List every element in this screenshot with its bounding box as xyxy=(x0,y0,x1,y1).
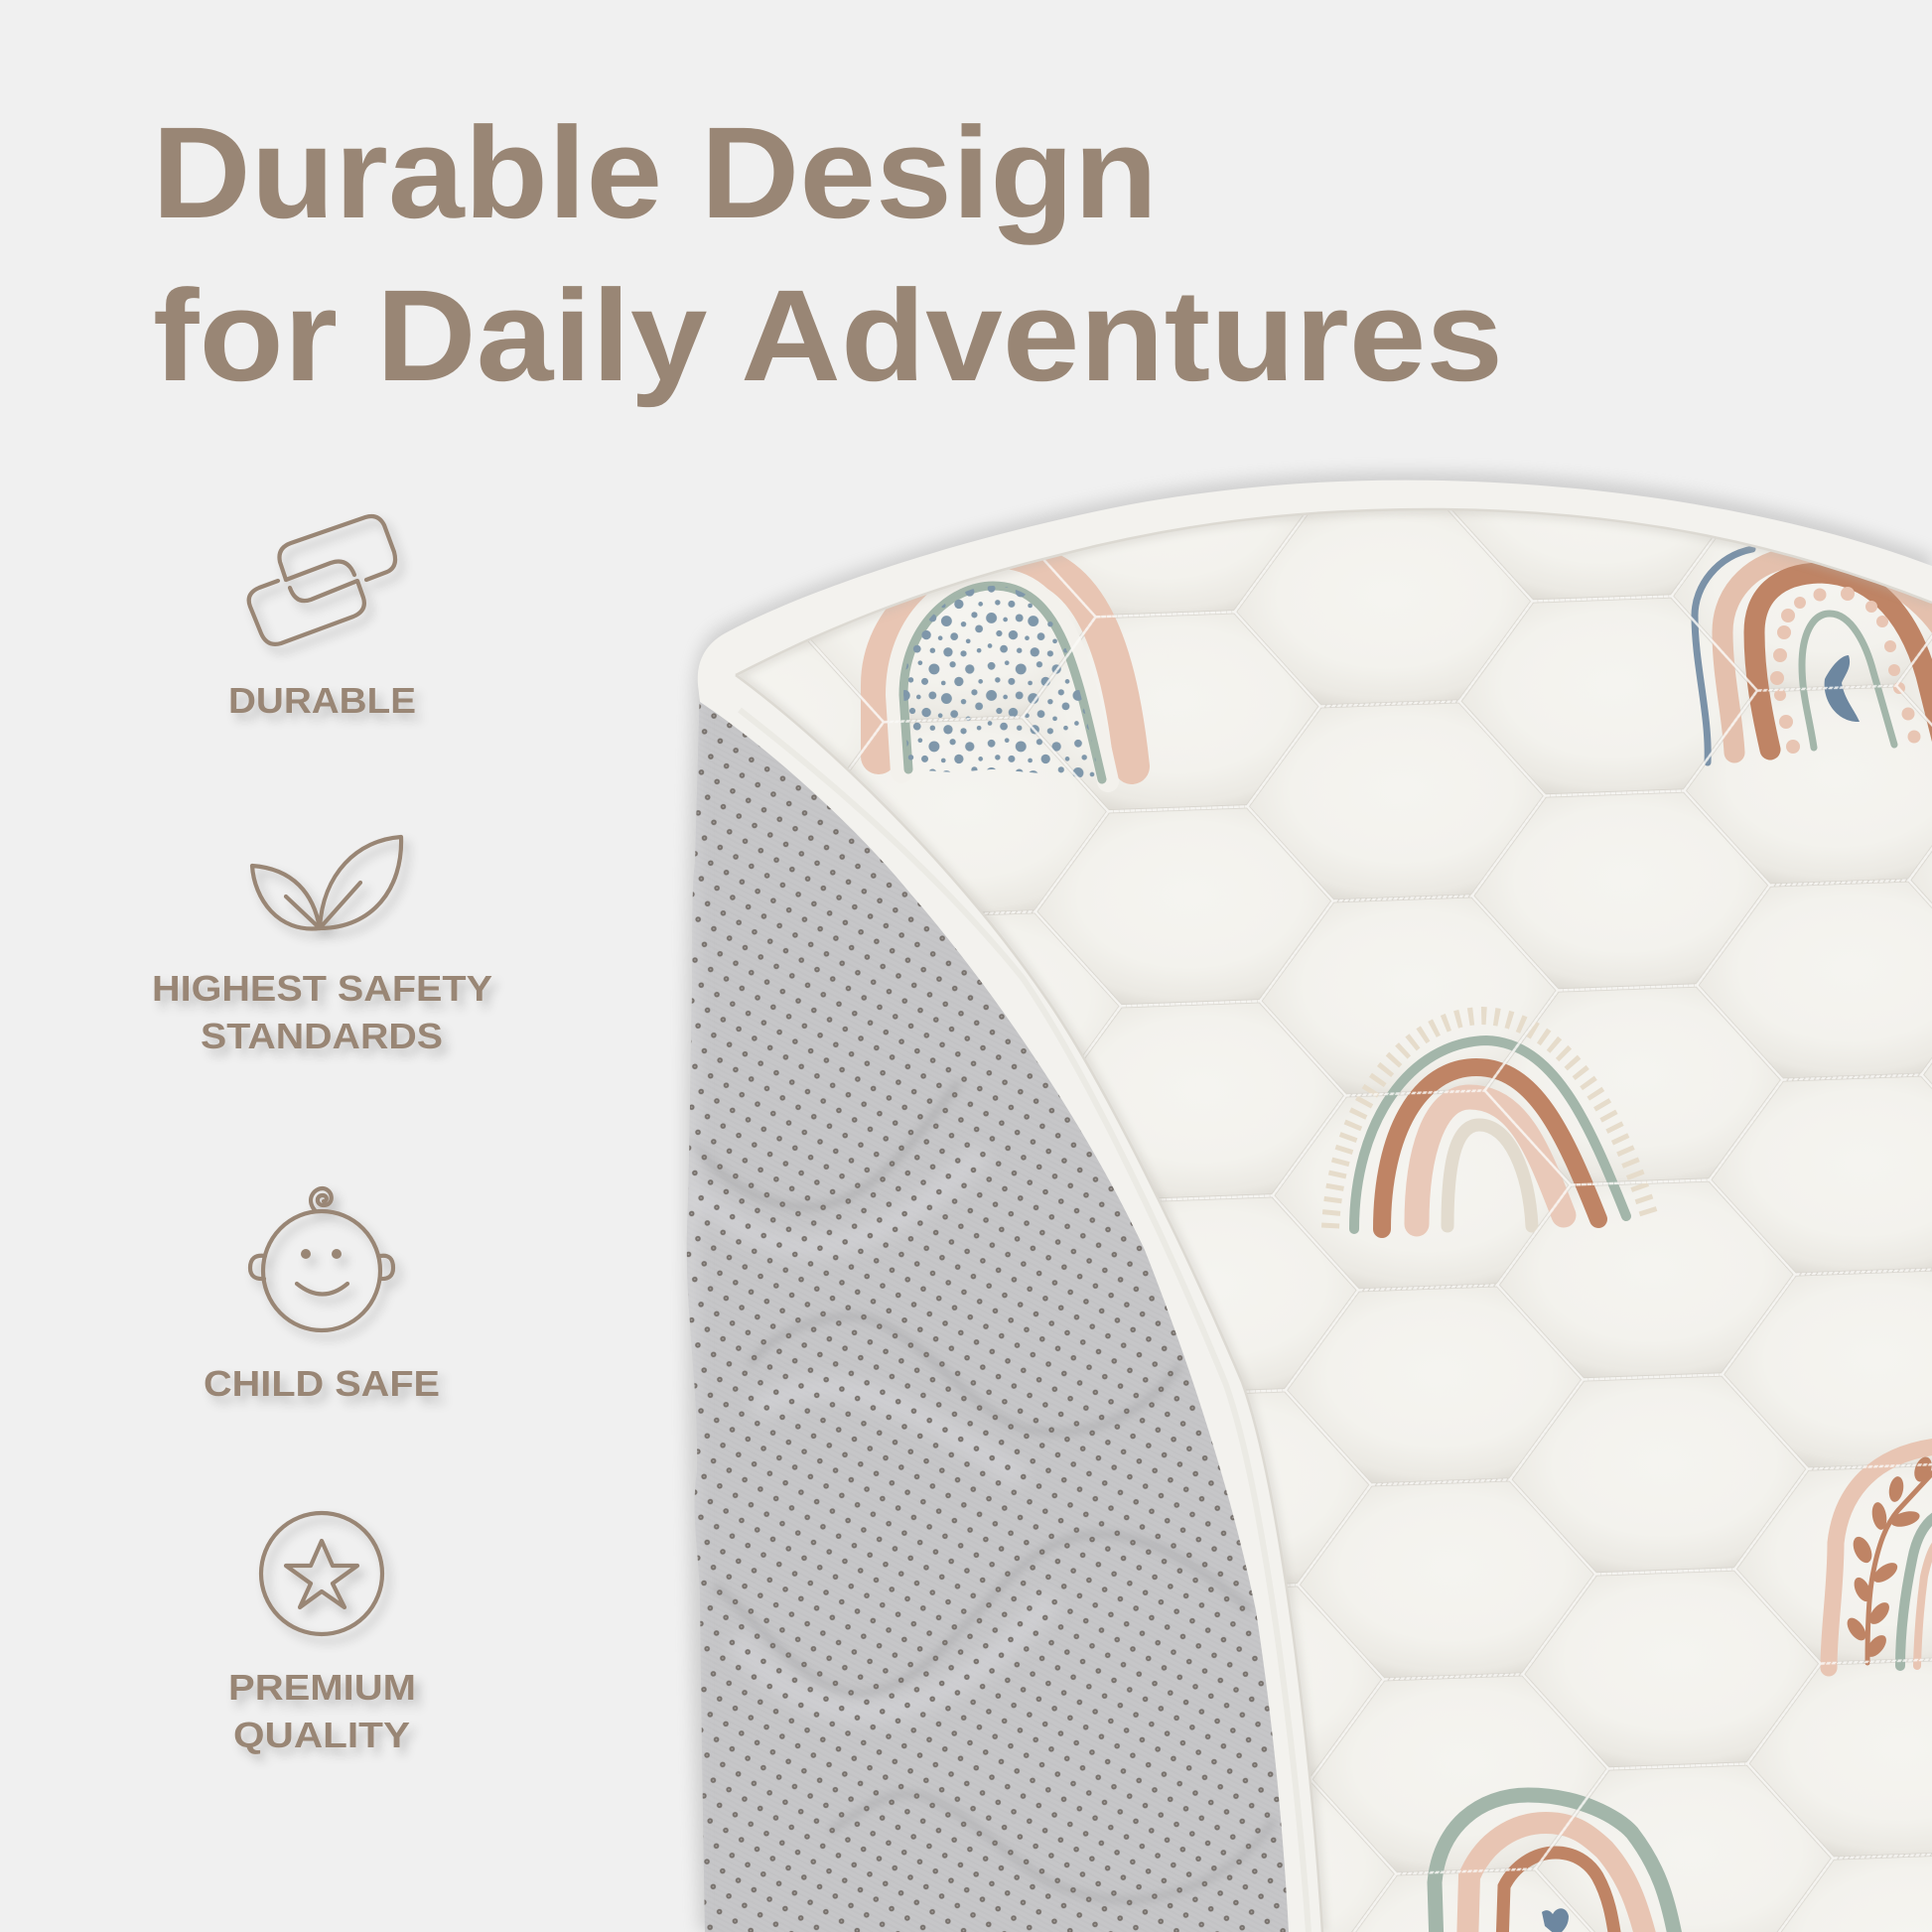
label: premium quality: PREMIUM xyxy=(228,1667,416,1708)
title: for Daily Adventures xyxy=(153,262,1503,408)
binding stitching xyxy=(736,509,1932,1932)
rainbow: centre with rays xyxy=(1330,1016,1651,1229)
feature: child safe xyxy=(204,1188,440,1404)
icon: chain links xyxy=(249,516,395,644)
mat shadow xyxy=(685,473,1932,1932)
feature: durable xyxy=(228,516,416,721)
title: Durable Design xyxy=(152,99,1158,245)
feature: highest safety standards xyxy=(152,837,492,1056)
product photo: quilted mat xyxy=(665,473,1932,1932)
quilted face xyxy=(715,496,1932,1932)
rainbow: dotted arch, top left xyxy=(879,562,1132,781)
underside: grey dotted fabric xyxy=(665,675,1340,1932)
title xyxy=(152,99,1503,408)
feature list xyxy=(152,516,492,1755)
quilting stitches xyxy=(715,496,1932,1932)
binding inner shadow xyxy=(736,509,1932,1932)
label: durable: DURABLE xyxy=(228,680,416,721)
rainbow: bottom with heart xyxy=(1435,1795,1677,1932)
rainbow: top right with moon xyxy=(1695,549,1932,762)
label: premium quality xyxy=(228,1667,416,1755)
label: child safe: CHILD SAFE xyxy=(204,1363,440,1404)
label: premium quality: QUALITY xyxy=(233,1715,410,1755)
rainbow: right with branch xyxy=(1829,1447,1932,1668)
label: highest safety standards xyxy=(152,968,492,1056)
feature: premium quality xyxy=(228,1513,416,1755)
icon: star in circle xyxy=(261,1513,382,1634)
label: highest safety standards: HIGHEST SAFETY xyxy=(152,968,492,1009)
icon: leaves xyxy=(252,837,401,928)
label: highest safety standards: STANDARDS xyxy=(201,1016,443,1056)
binding and face base xyxy=(698,481,1932,1932)
icon: baby face xyxy=(250,1188,393,1330)
